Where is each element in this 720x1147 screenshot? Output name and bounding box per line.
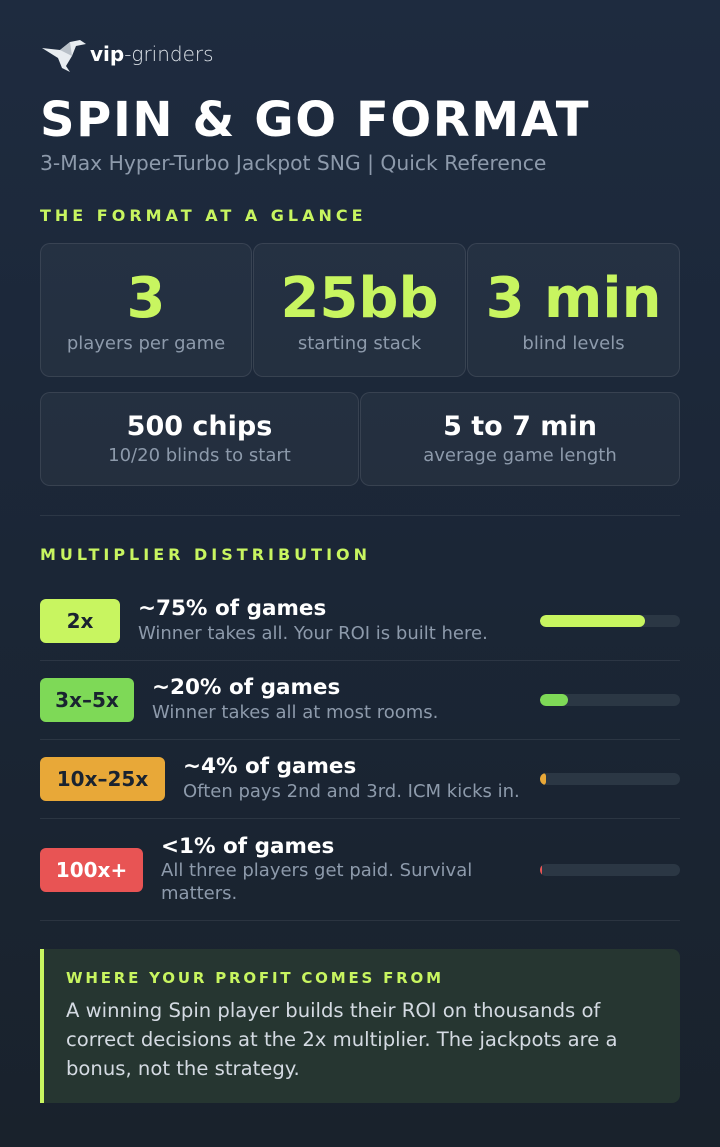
stat card: blind levels: blind levels (522, 333, 625, 354)
heading: multiplier distribution: MULTIPLIER DISTRIBUTION (40, 545, 371, 564)
stat card: players: players per game (67, 333, 225, 354)
row: 3x-5x (40, 675, 680, 723)
row: 2x: 2x (67, 609, 93, 633)
title: SPIN & GO FORMAT (40, 92, 590, 148)
stat card: game length (360, 392, 680, 486)
callout: profit (40, 949, 680, 1103)
stat card: blind levels (467, 243, 680, 377)
row: 2x: ~75% of games (138, 596, 326, 621)
row: 10x-25x: ~4% of games (183, 754, 356, 779)
stat card: players (40, 243, 252, 377)
row: 3x-5x: 3x–5x (55, 688, 119, 712)
row: 100x+: All three players get paid. Survival matters. (161, 860, 472, 904)
stat card: chips: 500 chips (127, 411, 272, 442)
stat card: stack (253, 243, 466, 377)
row: 100x+ (40, 834, 680, 904)
stat card: chips: 10/20 blinds to start (108, 445, 291, 466)
row: 100x+: 100x+ (56, 858, 127, 882)
stat card: stack: starting stack (298, 333, 421, 354)
logo (42, 40, 214, 72)
logo: vip-grinders (90, 42, 214, 66)
stat card: chips (40, 392, 359, 486)
callout heading: WHERE YOUR PROFIT COMES FROM (66, 969, 444, 987)
stat card: game length: 5 to 7 min (443, 411, 597, 442)
row: 2x: Winner takes all. Your ROI is built here. (138, 623, 488, 644)
row: 10x-25x: Often pays 2nd and 3rd. ICM kicks in. (183, 781, 520, 802)
stat card: game length: average game length (423, 445, 617, 466)
row: 10x-25x (40, 754, 680, 802)
stat card: blind levels: 3 min (486, 266, 661, 331)
subtitle: 3-Max Hyper-Turbo Jackpot SNG | Quick Reference (40, 151, 546, 175)
row: 3x-5x: ~20% of games (152, 675, 340, 700)
text: <1% of games (161, 834, 334, 859)
heading: format at a glance: THE FORMAT AT A GLANCE (40, 206, 367, 225)
row: 10x-25x: 10x–25x (57, 767, 148, 791)
row: 3x-5x: Winner takes all at most rooms. (152, 702, 438, 723)
row: 2x (40, 596, 680, 644)
stat card: players: 3 (127, 266, 165, 331)
callout text: A winning Spin player builds their ROI on thousands of correct decisions at the 2x multiplier. The jackpots are a bonus, not the strategy. (66, 999, 618, 1080)
stat card: stack: 25bb (280, 266, 439, 331)
